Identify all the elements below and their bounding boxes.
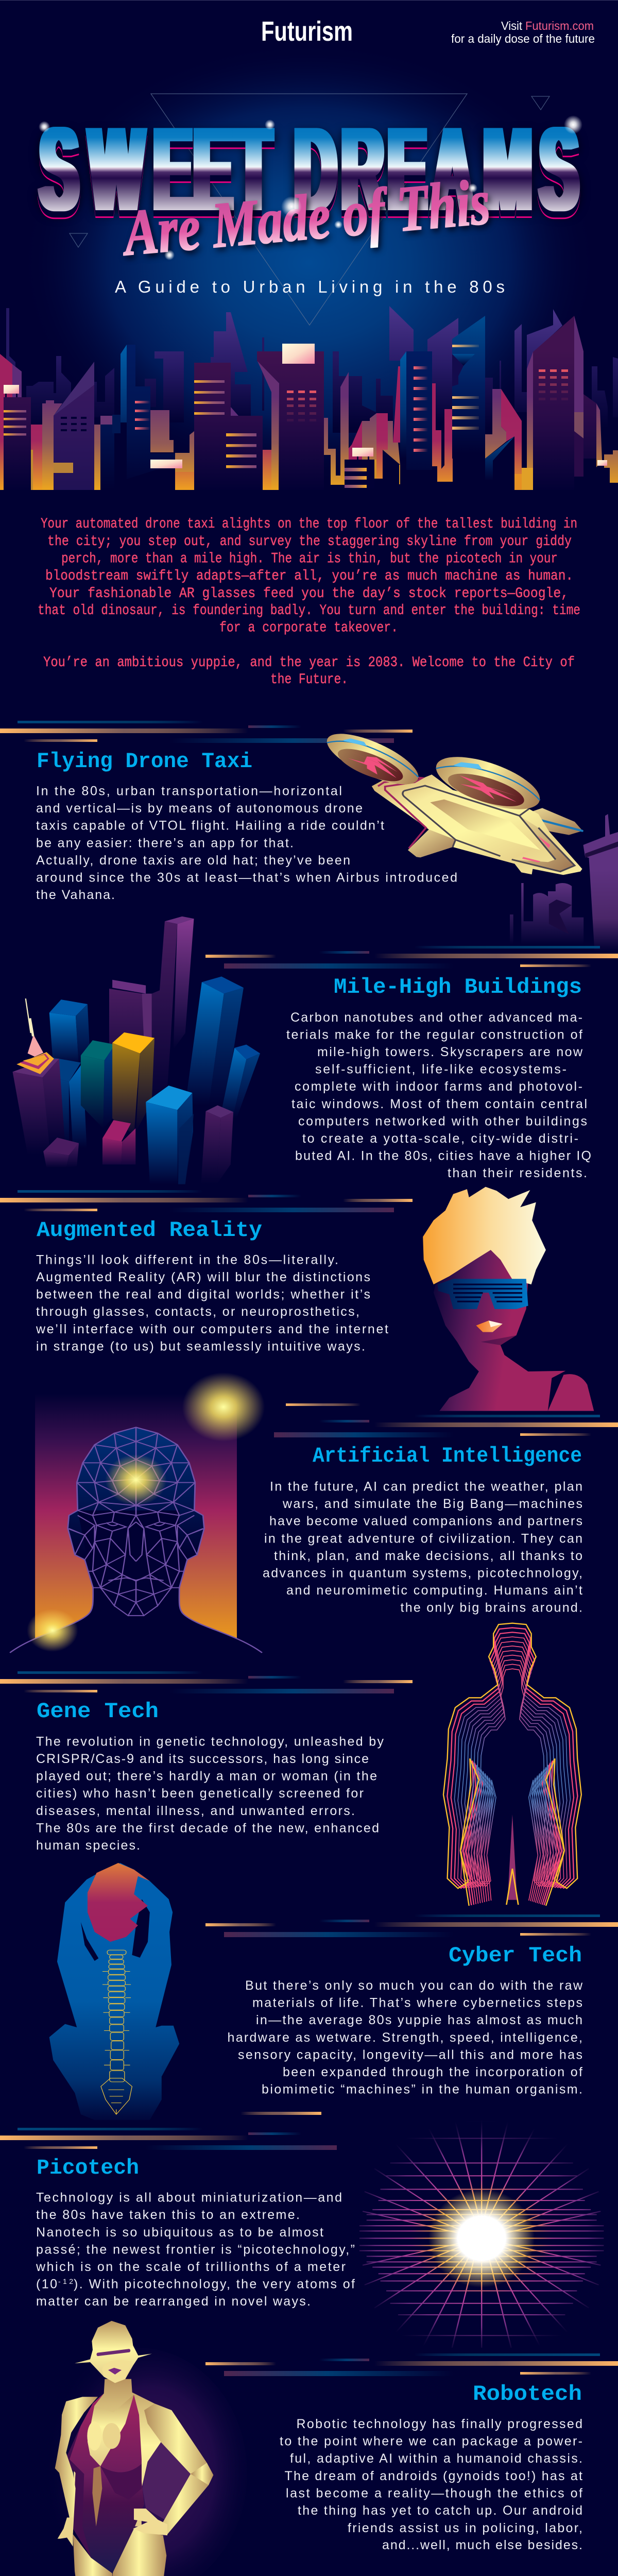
text: mile-high buildings bbox=[286, 1010, 591, 1180]
text: cyber tech: hardware as wetware. Strength, speed, intelligence, bbox=[228, 2030, 582, 2045]
tagline: visit Futurism.com: for a daily dose of the future bbox=[451, 32, 595, 45]
text: picotech: Technology is all about miniaturization—and bbox=[36, 2191, 342, 2205]
text: flying drone taxi: the Vahana. bbox=[36, 888, 115, 902]
spired purple tower bbox=[12, 998, 65, 1155]
text: picotech: (10 bbox=[36, 2277, 57, 2292]
left hand bbox=[58, 2517, 73, 2547]
text: augmented reality: in strange (to us) but seamlessly intuitive ways. bbox=[36, 1339, 365, 1353]
tall purple tower bbox=[150, 917, 194, 1105]
text: picotech: ). With picotechnology, the very atoms of bbox=[74, 2277, 355, 2292]
torso bbox=[74, 2379, 161, 2527]
speed lines: gene tech bbox=[0, 1671, 413, 1693]
title sparkles bbox=[39, 115, 582, 260]
drone fan left bbox=[319, 724, 426, 794]
text: cyber tech: sensory capacity, longevity—all this and more has bbox=[238, 2047, 582, 2062]
text: flying drone taxi: Actually, drone taxis are old hat; they’ve been bbox=[36, 853, 350, 868]
text: gene tech: CRISPR/Cas-9 and its successors, has long since bbox=[36, 1752, 369, 1766]
text: mile-high buildings: computers networked with other buildings bbox=[298, 1114, 587, 1128]
text: gene tech: human species. bbox=[36, 1838, 140, 1853]
text: augmented reality bbox=[36, 1252, 388, 1353]
text: artificial intelligence: In the future, AI can predict the weather, plan bbox=[270, 1480, 582, 1494]
title script: Are Made of This: Are Made of This bbox=[118, 166, 493, 269]
text: gene tech: cities) who hasn’t been genetically screened for bbox=[36, 1786, 364, 1801]
text: flying drone taxi bbox=[36, 784, 457, 902]
text: picotech: passé; the newest frontier is “picotechnology,” bbox=[36, 2242, 355, 2257]
text: flying drone taxi: around since the 30s at least—that’s when Airbus introduced bbox=[36, 871, 457, 885]
text: flying drone taxi: be any easier: there’s an app for that. bbox=[36, 836, 294, 850]
intro paragraph bbox=[38, 516, 580, 688]
gold tower bbox=[112, 1032, 154, 1135]
text: artificial intelligence: in the great adventure of civilization. They can bbox=[264, 1531, 582, 1546]
grid lines bbox=[359, 2108, 604, 2348]
text: mile-high buildings: terials make for the regular construction of bbox=[286, 1027, 582, 1042]
text: picotech: matter can be rearranged in novel ways. bbox=[36, 2294, 311, 2309]
lips bbox=[108, 2368, 122, 2375]
text: gene tech bbox=[36, 1734, 384, 1853]
heading: Mile-High Buildings: Mile-High Buildings bbox=[334, 975, 582, 999]
drone body bbox=[372, 774, 582, 875]
illustration: gene tech back and spine bbox=[49, 1863, 179, 2120]
woman hair bbox=[423, 1187, 546, 1284]
intro paragraph: the Future. bbox=[270, 672, 348, 688]
woman lips bbox=[476, 1320, 503, 1332]
speed lines: artificial intelligence bbox=[274, 1403, 618, 1437]
heading: Flying Drone Taxi: Flying Drone Taxi bbox=[37, 749, 252, 774]
purple mid tower bbox=[109, 980, 152, 1099]
right purple tower bbox=[201, 1105, 233, 1184]
text: robotech: ful, adaptive AI within a humanoid chassis. bbox=[290, 2451, 582, 2466]
back silhouette bbox=[49, 1863, 179, 2120]
header glow bbox=[0, 31, 618, 495]
text: augmented reality: Things’ll look different in the 80s—literally. bbox=[36, 1252, 338, 1267]
woman glasses bbox=[437, 1279, 528, 1309]
subtitle: A Guide to Urban Living in the 80s bbox=[115, 277, 505, 296]
text: flying drone taxi: and vertical—is by means of autonomous drone bbox=[36, 801, 363, 816]
text: robotech: Robotic technology has finally progressed bbox=[297, 2417, 582, 2431]
glows bbox=[105, 1454, 167, 1505]
text: cyber tech bbox=[228, 1978, 583, 2097]
text: gene tech: The revolution in genetic technology, unleashed by bbox=[36, 1734, 384, 1749]
skyline centre group bbox=[194, 363, 231, 490]
text: robotech: The dream of androids (gynoids too!) has at bbox=[284, 2469, 582, 2483]
chest bbox=[88, 2395, 134, 2466]
heading: Picotech: Picotech bbox=[37, 2156, 139, 2180]
speed lines: augmented reality bbox=[0, 1190, 413, 1212]
text: picotech: the 80s have taken this to an extreme. bbox=[36, 2208, 300, 2222]
skyline right group bbox=[400, 351, 406, 464]
heading: Robotech: Robotech bbox=[473, 2382, 582, 2406]
text: cyber tech: materials of life. That’s where cybernetics steps bbox=[252, 1996, 582, 2010]
text: augmented reality: Augmented Reality (AR) will blur the distinctions bbox=[36, 1270, 370, 1284]
teal tower bbox=[81, 1040, 115, 1128]
blue far-right tower bbox=[220, 1044, 260, 1118]
heading: Gene Tech: Gene Tech bbox=[37, 1699, 159, 1724]
speed lines: flying drone taxi bbox=[0, 721, 413, 743]
right arm bbox=[144, 2403, 213, 2535]
text: augmented reality: through glasses, contacts, or neuroprosthetics, bbox=[36, 1304, 359, 1319]
right hand bbox=[133, 2509, 167, 2535]
blue left tower bbox=[49, 999, 90, 1066]
text: augmented reality: between the real and digital worlds; whether it’s bbox=[36, 1287, 370, 1302]
woman face and shoulders bbox=[434, 1245, 565, 1411]
text: robotech: last become a reality—though the ethics of bbox=[286, 2486, 582, 2501]
text: artificial intelligence: advances in quantum systems, picotechnology, bbox=[263, 1566, 582, 1581]
drone rear fin bbox=[519, 808, 582, 835]
text: mile-high buildings: mile-high towers. Skyscrapers are now bbox=[317, 1045, 583, 1059]
head silhouette bbox=[10, 1427, 262, 1673]
text: mile-high buildings: Carbon nanotubes and other advanced ma- bbox=[290, 1010, 582, 1025]
text: robotech bbox=[280, 2417, 582, 2552]
text: gene tech: played out; there’s hardly a man or woman (in the bbox=[36, 1769, 377, 1784]
title: Sweet Dreams: SWEET DREAMS bbox=[40, 102, 578, 236]
text: mile-high buildings: to create a yotta-scale, city-wide distri- bbox=[302, 1131, 578, 1146]
knot bbox=[92, 2466, 102, 2527]
star glow bbox=[428, 2189, 535, 2287]
text: mile-high buildings: than their residents. bbox=[448, 1166, 587, 1180]
purple gap behind arm bbox=[143, 2442, 191, 2520]
distant tower bbox=[583, 814, 618, 953]
illustration: contour body figure bbox=[443, 1623, 581, 1906]
logo: Futurism: Futurism bbox=[261, 16, 353, 47]
legs bbox=[73, 2534, 112, 2576]
text: artificial intelligence: wars, and simulate the Big Bang—machines bbox=[282, 1497, 582, 1511]
skyline: header city bbox=[0, 306, 618, 490]
left arm bbox=[55, 2397, 98, 2533]
text: gene tech: The 80s are the first decade of the new, enhanced bbox=[36, 1821, 379, 1835]
text: picotech: which is on the scale of trillionths of a meter bbox=[36, 2260, 346, 2274]
text: artificial intelligence: have become valued companions and partners bbox=[269, 1514, 582, 1529]
text: cyber tech: But there’s only so much you can do with the raw bbox=[245, 1978, 583, 1993]
text: mile-high buildings: complete with indoor farms and photovol- bbox=[295, 1079, 582, 1094]
speed lines: cyber tech bbox=[205, 1914, 618, 1937]
illustration: picotech star grid bbox=[359, 2108, 604, 2348]
text: cyber tech: in—the average 80s yuppie has almost as much bbox=[256, 2013, 582, 2027]
skyline left group bbox=[0, 354, 12, 490]
decorative triangles bbox=[70, 94, 550, 325]
figure centre spike bbox=[508, 1815, 517, 1900]
speed lines: robotech bbox=[205, 2353, 618, 2376]
visor bbox=[98, 2350, 129, 2354]
blue back tower bbox=[185, 976, 244, 1105]
heading: Augmented Reality: Augmented Reality bbox=[37, 1218, 262, 1243]
head bbox=[75, 2321, 152, 2383]
text: robotech: and...well, much else besides. bbox=[382, 2538, 582, 2552]
speed lines: picotech bbox=[0, 2112, 337, 2150]
text: artificial intelligence: the only big brains around. bbox=[401, 1601, 582, 1615]
speed lines: mile-high buildings bbox=[205, 946, 618, 969]
tagline: visit Futurism.com: Visit bbox=[501, 19, 523, 32]
swimsuit bbox=[65, 2394, 144, 2573]
illustration: android woman bbox=[27, 2321, 247, 2576]
text: mile-high buildings: taic windows. Most of them contain central bbox=[291, 1097, 587, 1111]
text: flying drone taxi: taxis capable of VTOL flight. Hailing a ride couldn’t bbox=[36, 819, 384, 833]
text: cyber tech: been expanded through the incorporation of bbox=[283, 2065, 582, 2079]
text: gene tech: diseases, mental illness, and unwanted errors. bbox=[36, 1804, 355, 1818]
text: picotech: -12 bbox=[58, 2277, 73, 2285]
illustration: flying drone bbox=[319, 724, 618, 953]
text: augmented reality: we’ll interface with our computers and the internet bbox=[36, 1322, 388, 1336]
hair bbox=[88, 1863, 150, 1942]
intro paragraph: for a corporate takeover. bbox=[219, 620, 398, 636]
text: picotech bbox=[36, 2191, 355, 2309]
text: robotech: to the point where we can package a power- bbox=[280, 2434, 582, 2449]
heading: Artificial Intelligence: Artificial Intelligence bbox=[313, 1444, 582, 1468]
illustration: AI wireframe head bbox=[10, 1372, 265, 1673]
spine bbox=[101, 1950, 132, 2114]
front bright blue tower bbox=[146, 1086, 194, 1184]
tagline: visit Futurism.com: Futurism.com bbox=[525, 19, 594, 32]
small purple block bbox=[43, 1138, 79, 1168]
distant city bbox=[510, 883, 583, 944]
text: robotech: the thing has yet to catch up. Our android bbox=[298, 2503, 582, 2518]
magenta tower bbox=[102, 1120, 135, 1164]
text: mile-high buildings: buted AI. In the 80s, cities have a higher IQ bbox=[295, 1149, 591, 1163]
blue inner tower bbox=[53, 1058, 87, 1148]
text: cyber tech: biomimetic “machines” in the human organism. bbox=[262, 2082, 582, 2097]
aura bbox=[27, 2348, 247, 2576]
text: picotech: Nanotech is so ubiquitous as to be almost bbox=[36, 2225, 323, 2240]
text: robotech: friends assist us in policing, labor, bbox=[348, 2521, 582, 2535]
text: mile-high buildings: self-sufficient, life-like ecosystems- bbox=[315, 1062, 566, 1077]
text: artificial intelligence bbox=[263, 1480, 582, 1615]
illustration: woman with AR glasses bbox=[423, 1187, 594, 1411]
tagline: visit Futurism.com bbox=[451, 19, 595, 45]
drone fan right bbox=[428, 746, 547, 820]
head mesh bbox=[68, 1427, 136, 1616]
text: flying drone taxi: In the 80s, urban transportation—horizontal bbox=[36, 784, 342, 799]
text: artificial intelligence: and neuromimetic computing. Humans ain’t bbox=[286, 1583, 582, 1598]
gradient panel bbox=[35, 1394, 237, 1639]
illustration: mile-high skyscrapers bbox=[12, 917, 260, 1184]
text: artificial intelligence: think, plan, and make decisions, all thanks to bbox=[274, 1549, 582, 1563]
heading: Cyber Tech: Cyber Tech bbox=[449, 1943, 582, 1968]
